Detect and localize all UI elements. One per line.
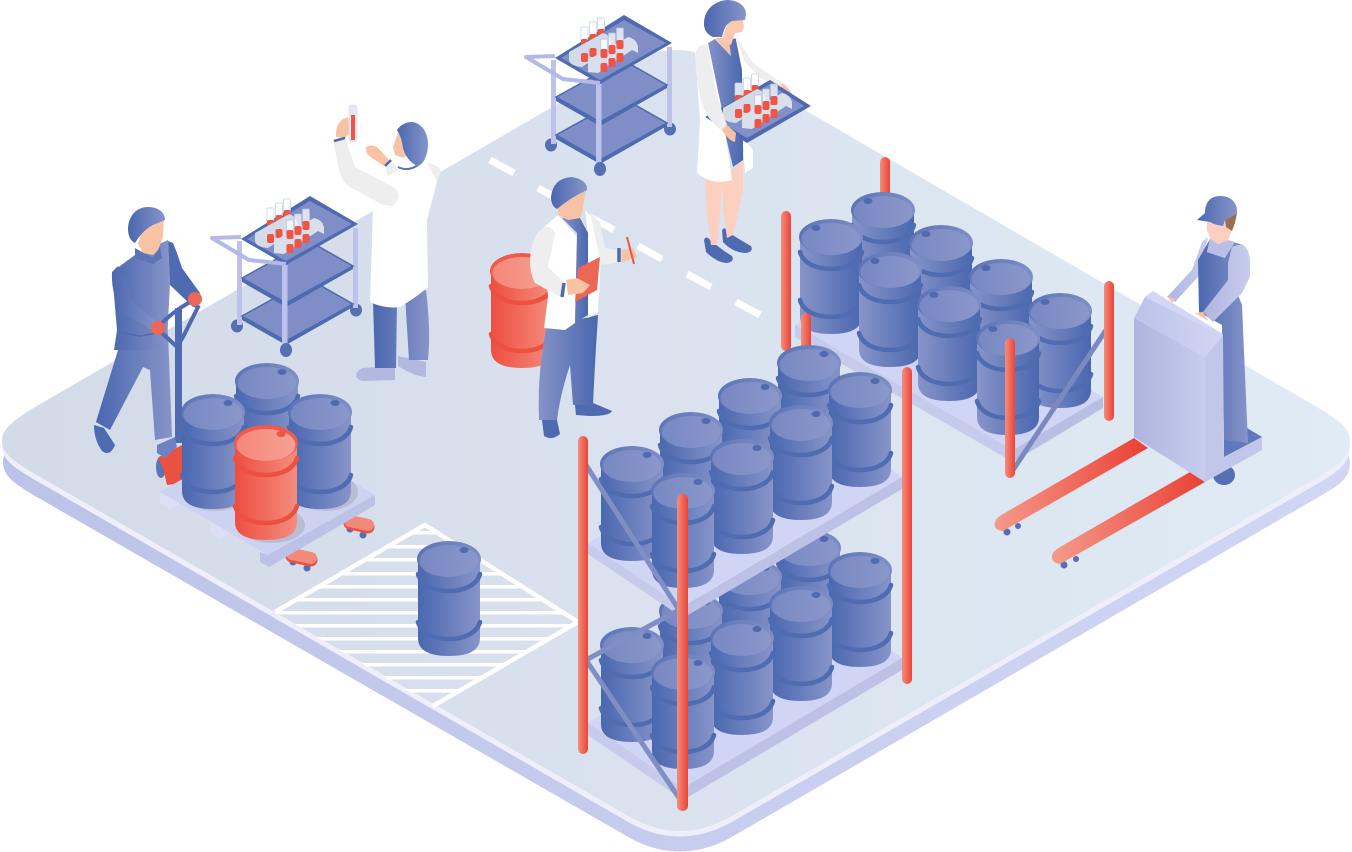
test tube bbox=[349, 105, 357, 142]
road dashes bbox=[490, 160, 760, 315]
back post bbox=[801, 313, 811, 363]
lab coat bbox=[370, 165, 440, 307]
collar bbox=[135, 247, 162, 264]
hands on truck bbox=[1167, 296, 1208, 321]
red post back bbox=[880, 157, 890, 217]
standing platform bbox=[1224, 428, 1262, 457]
truck front bbox=[1134, 318, 1205, 482]
belt bbox=[117, 332, 157, 336]
trousers bbox=[373, 290, 429, 368]
overalls bbox=[1198, 239, 1248, 443]
raised sleeve bbox=[333, 138, 399, 206]
lab coat bbox=[695, 35, 782, 182]
pencil bbox=[627, 237, 634, 264]
hair bbox=[704, 0, 746, 37]
lab coat bbox=[543, 210, 601, 330]
near arm bbox=[112, 266, 158, 332]
near cuff bbox=[562, 283, 564, 297]
near sleeve bbox=[695, 45, 727, 131]
scientist with clipboard bbox=[530, 177, 637, 438]
tray inner bbox=[713, 84, 804, 138]
pallet truck bbox=[995, 196, 1262, 568]
shirt bbox=[562, 218, 588, 323]
lab cart with test tubes, left bbox=[212, 196, 362, 357]
jack red base bbox=[158, 445, 182, 485]
right fork bbox=[1052, 472, 1205, 564]
pallet deck bbox=[160, 430, 375, 555]
barrels back right bbox=[799, 192, 1092, 435]
second cuff bbox=[385, 160, 391, 166]
chest skin bbox=[715, 38, 733, 58]
far sleeve bbox=[590, 212, 617, 265]
jack pole bbox=[175, 308, 182, 443]
tray bbox=[705, 80, 811, 143]
rack posts bbox=[578, 367, 912, 811]
face bbox=[138, 215, 164, 255]
far hand bbox=[781, 83, 793, 98]
fork tips bbox=[290, 521, 368, 572]
rack front post bbox=[1005, 338, 1015, 478]
back right rack with barrels bbox=[781, 157, 1114, 478]
cap bbox=[128, 207, 165, 243]
rear wheel bbox=[1213, 465, 1235, 485]
shoes bbox=[704, 228, 752, 263]
rack right post bbox=[1104, 281, 1114, 421]
near arm bbox=[1203, 245, 1250, 322]
worker bbox=[1167, 196, 1250, 443]
shirt collar bbox=[1207, 238, 1235, 258]
upper shelf bbox=[588, 413, 902, 607]
gloves bbox=[151, 292, 202, 335]
barrel shadows bbox=[184, 473, 358, 543]
near sleeve bbox=[530, 227, 565, 297]
legs bbox=[705, 160, 743, 245]
pallet edge bbox=[260, 495, 375, 567]
jack plate bbox=[157, 437, 177, 458]
hair bbox=[1225, 213, 1237, 231]
shoulder bbox=[427, 163, 441, 181]
collar bbox=[398, 165, 418, 169]
worker pushing pallet jack bbox=[94, 207, 375, 572]
face bbox=[393, 133, 407, 158]
fork wheels bbox=[1004, 523, 1079, 568]
middle rack with barrels bbox=[578, 313, 912, 811]
near hand bbox=[722, 125, 736, 142]
far cuff bbox=[617, 248, 621, 262]
pallet feet bbox=[160, 492, 280, 567]
rack brace bbox=[1013, 330, 1106, 470]
face bbox=[722, 16, 744, 45]
trousers bbox=[539, 315, 598, 420]
jack wheel bbox=[156, 456, 166, 478]
barrels on pallet bbox=[181, 363, 352, 540]
left fork bbox=[995, 438, 1148, 531]
far arm bbox=[168, 241, 200, 307]
second sleeve bbox=[385, 161, 398, 176]
face bbox=[1207, 218, 1232, 244]
woman scientist with tray bbox=[695, 0, 811, 263]
boot bbox=[94, 425, 115, 453]
lab cart with test tubes, back bbox=[526, 15, 676, 176]
shelf bbox=[795, 270, 1103, 450]
truck top bbox=[1145, 291, 1223, 336]
hatched floor zone bbox=[270, 525, 590, 706]
rack post left bbox=[781, 211, 791, 351]
raised hand bbox=[336, 117, 350, 138]
hair bbox=[397, 122, 428, 166]
jack handle bbox=[158, 302, 198, 347]
face bbox=[558, 190, 586, 220]
cap bbox=[551, 177, 587, 209]
red barrel behind scientist bbox=[490, 253, 554, 368]
second hand bbox=[366, 146, 389, 166]
near hand bbox=[566, 278, 590, 295]
tray test tubes bbox=[723, 74, 792, 129]
dress bbox=[708, 38, 743, 167]
shoes bbox=[542, 403, 612, 438]
cuff bbox=[334, 138, 345, 141]
shoes bbox=[356, 356, 426, 381]
cap bbox=[1197, 196, 1237, 226]
rack braces bbox=[586, 465, 679, 798]
upper barrels bbox=[600, 345, 892, 588]
lower barrels bbox=[600, 530, 892, 769]
single barrel on hatched zone bbox=[417, 541, 481, 656]
far hand bbox=[621, 248, 637, 262]
far arm bbox=[1167, 237, 1208, 302]
far arm sleeve bbox=[735, 35, 782, 90]
torso bbox=[112, 240, 170, 350]
truck bevel bbox=[1134, 297, 1223, 357]
scientist raising test tube bbox=[333, 105, 441, 381]
truck side bbox=[1205, 335, 1262, 482]
clipboard bbox=[575, 257, 600, 302]
worker legs bbox=[96, 332, 172, 440]
lower shelf bbox=[588, 593, 902, 788]
